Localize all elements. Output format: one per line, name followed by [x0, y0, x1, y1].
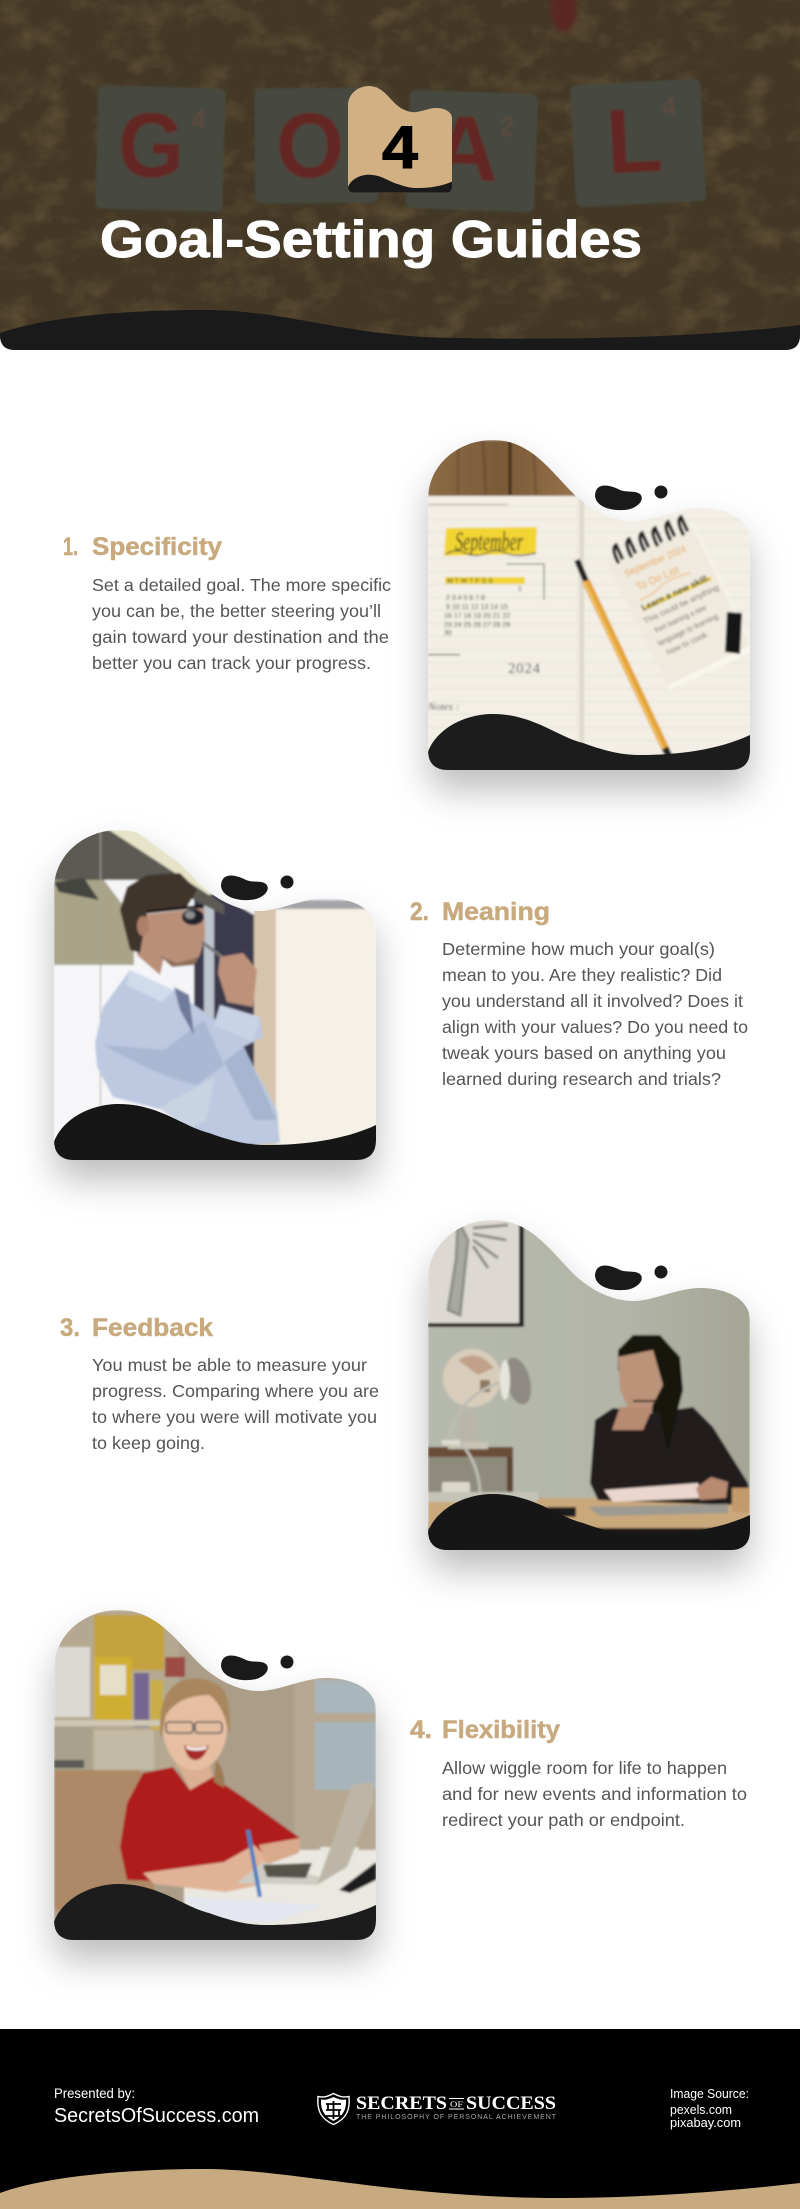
photo: man with glasses — [54, 830, 376, 1160]
cup — [319, 1846, 360, 1851]
heading 3: 3. — [60, 1314, 80, 1342]
logo: THE PHILOSOPHY OF PERSONAL ACHIEVEMENT — [356, 2114, 557, 2121]
pencil — [577, 560, 586, 581]
presented by — [54, 2086, 259, 2127]
photo: notebook and pencil: September 2024 — [623, 544, 688, 580]
marker cap — [725, 612, 742, 654]
sweater — [120, 1767, 300, 1883]
woman — [616, 1334, 684, 1415]
arms and hand — [143, 1845, 269, 1892]
section 2 text: Meaning — [410, 898, 748, 1089]
photo: woman at desk with globe — [428, 1220, 750, 1550]
title: Goal-Setting Guides — [100, 211, 642, 269]
heading 2: Meaning — [442, 898, 550, 926]
body text 1: better you can track your progress. — [92, 653, 371, 673]
photo: notebook and pencil: This could be anything — [642, 583, 720, 626]
body text 1: Set a detailed goal. The more specific — [92, 575, 391, 595]
heading 4: Flexibility — [442, 1716, 560, 1744]
photo: notebook and pencil — [427, 440, 752, 770]
heading 1: Specificity — [92, 533, 222, 561]
header banner — [0, 0, 800, 350]
badge numeral: 4 — [382, 114, 419, 181]
body text 2: learned during research and trials? — [442, 1069, 721, 1089]
heading 4: 4. — [410, 1716, 432, 1744]
card 3 dark wave — [428, 1494, 750, 1550]
photo: notebook and pencil: how to cook. — [665, 629, 711, 657]
photo: notebook and pencil: 1 — [518, 586, 522, 593]
neck — [173, 1760, 213, 1790]
scrabble tile A: A — [430, 97, 500, 201]
decorative blob and dot 4 — [221, 1656, 294, 1680]
head — [137, 908, 205, 975]
scrabble tile A: 2 — [499, 113, 514, 141]
photo: notebook and pencil: Notes : — [427, 701, 459, 713]
scrabble tile L: L — [603, 89, 665, 194]
photo: notebook and pencil: 23 24 25 26 27 28 29 — [444, 622, 510, 629]
decorative blob and dot 1 — [595, 486, 668, 510]
desk — [428, 1498, 750, 1528]
card 2 dark wave — [54, 1104, 376, 1160]
card 1 dark wave — [428, 714, 750, 770]
icon: shield — [318, 2094, 349, 2124]
scrabble tile O: O — [276, 95, 344, 197]
hand and pen — [202, 942, 222, 957]
laptop — [317, 1782, 373, 1885]
decorative blob and dot 3 — [595, 1266, 668, 1290]
image source: Image Source: — [670, 2086, 749, 2101]
shirt — [95, 970, 280, 1145]
heading 3: Feedback — [92, 1314, 213, 1342]
logo: SECRETS — [356, 2094, 447, 2114]
chair — [54, 1770, 154, 1910]
photo: notebook and pencil: from learning a new — [653, 603, 708, 635]
header dark wave — [0, 310, 800, 350]
image source: pixabay.com — [670, 2115, 741, 2130]
photo: woman in red with laptop — [54, 1610, 376, 1940]
photo: notebook and pencil: Learn a new skill. — [640, 572, 711, 613]
body text 3: to keep going. — [92, 1433, 205, 1453]
header cork photo background — [0, 0, 800, 350]
body text 2: you understand all it involved? Does it — [442, 991, 743, 1011]
body text 4: and for new events and information to — [442, 1784, 747, 1804]
photo: notebook and pencil: September — [455, 527, 524, 556]
photo: notebook and pencil: To Do List — [634, 564, 681, 594]
scrabble tile G — [95, 85, 226, 212]
photo: notebook and pencil: 16 17 18 19 20 21 22 — [444, 613, 510, 620]
card 1: notebook photo — [427, 440, 752, 770]
body text 3: progress. Comparing where you are — [92, 1381, 379, 1401]
body text 4 — [442, 1758, 747, 1830]
card 2: thinking man photo — [54, 830, 376, 1160]
body text 2: align with your values? Do you need to — [442, 1017, 748, 1037]
logo: SUCCESS — [466, 2094, 556, 2114]
lamp — [450, 1382, 503, 1492]
image source — [670, 2086, 749, 2130]
section 3 text: Feedback — [60, 1314, 379, 1453]
scrabble tile O — [254, 87, 378, 204]
desk — [184, 1850, 376, 1940]
footer tan wave — [0, 2169, 800, 2209]
decorative blob and dot 2 — [221, 876, 294, 900]
body text 4: Allow wiggle room for life to happen — [442, 1758, 727, 1778]
body text 2 — [442, 939, 748, 1089]
tablet — [161, 1079, 214, 1126]
body text 2: Determine how much your goal(s) — [442, 939, 715, 959]
photo: notebook and pencil: 2024 — [508, 661, 540, 677]
photo: notebook and pencil: M T W T F S S — [447, 578, 493, 585]
heading 2: 2. — [410, 898, 429, 926]
footer panel — [0, 2029, 800, 2209]
body text 3: to where you were will motivate you — [92, 1407, 377, 1427]
shelf — [428, 1447, 513, 1457]
body text 4: redirect your path or endpoint. — [442, 1810, 685, 1830]
image source: pexels.com — [670, 2102, 732, 2117]
body text 1: you can be, the better steering you’ll — [92, 601, 381, 621]
card 3: woman at desk photo — [428, 1220, 750, 1550]
logo: OF — [450, 2100, 464, 2109]
globe — [443, 1349, 501, 1407]
badge with number 4 — [348, 86, 452, 193]
pen — [248, 1830, 260, 1897]
body text 3 — [92, 1355, 379, 1453]
scrabble tile A — [406, 90, 538, 212]
scrabble tile G: G — [117, 94, 185, 198]
scrabble tile L — [570, 79, 706, 207]
card 4: smiling woman photo — [54, 1610, 376, 1940]
body text 2: tweak yours based on anything you — [442, 1043, 726, 1063]
logo — [318, 2094, 557, 2124]
section 1 text: Specificity — [63, 533, 391, 673]
presented by: Presented by: — [54, 2086, 135, 2101]
presented by: SecretsOfSuccess.com — [54, 2105, 259, 2127]
body text 2: mean to you. Are they realistic? Did — [442, 965, 722, 985]
photo: notebook and pencil: 9 10 11 12 13 14 15 — [446, 604, 508, 611]
heading 1: 1. — [63, 533, 78, 561]
photo: notebook and pencil: 2 3 4 5 6 7 8 — [446, 595, 485, 602]
card 4 dark wave — [54, 1884, 376, 1940]
head — [163, 1686, 227, 1770]
body text 3: You must be able to measure your — [92, 1355, 367, 1375]
scrabble tile G: 4 — [191, 106, 206, 134]
photo: notebook and pencil: language to learning — [656, 612, 720, 648]
section 4 text: Flexibility — [410, 1716, 747, 1830]
body text 1: gain toward your destination and the — [92, 627, 389, 647]
photo: notebook and pencil: 30 — [444, 630, 452, 637]
notepad — [670, 532, 750, 689]
body text 1 — [92, 575, 391, 673]
calculator — [339, 1862, 376, 1893]
scrabble tile L: 4 — [662, 93, 677, 122]
